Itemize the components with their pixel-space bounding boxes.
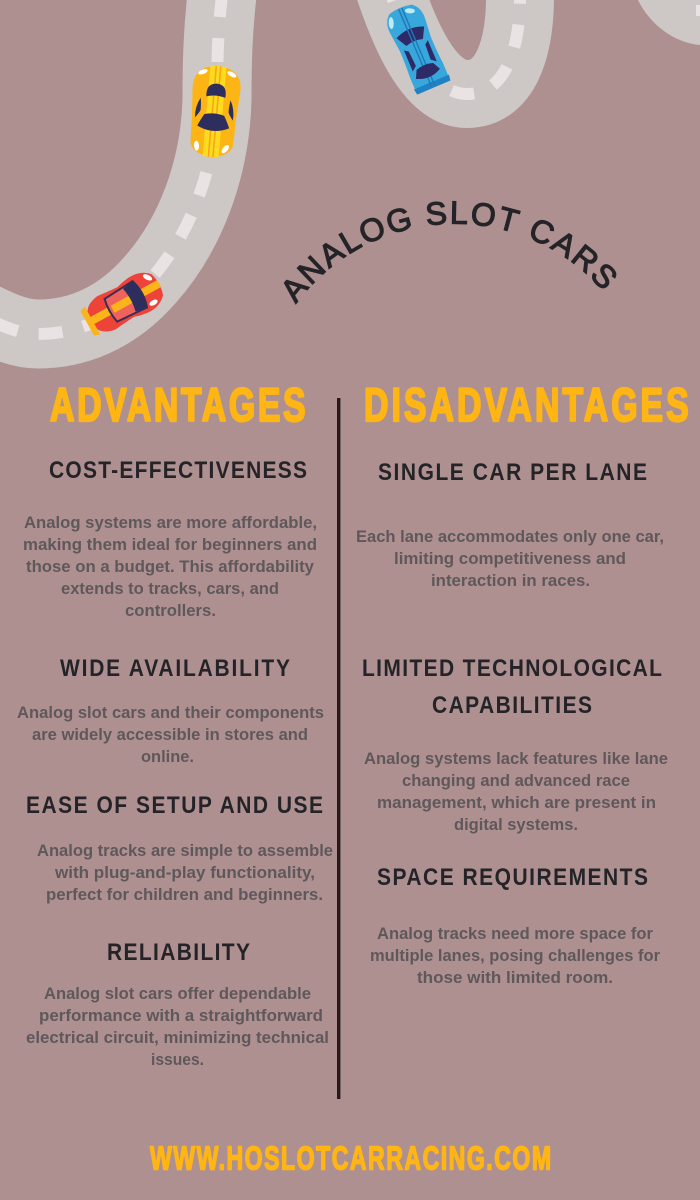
panel: wide availability: Analog slot cars and their components xyxy=(17,704,324,722)
panel: limited technological capabilities: LIMITED TECHNOLOGICAL xyxy=(362,655,662,681)
panel: ease of setup and use: perfect for children and beginners. xyxy=(46,886,323,904)
panel: limited technological capabilities xyxy=(362,655,668,834)
left winding road xyxy=(0,0,222,334)
panel: ease of setup and use: with plug-and-play functionality, xyxy=(54,864,315,882)
panel: limited technological capabilities: CAPABILITIES xyxy=(432,692,592,718)
footer website: WWW.HOSLOTCARRACING.COM xyxy=(150,1141,551,1178)
panel: cost-effectiveness: extends to tracks, cars, and xyxy=(61,580,279,598)
panel: ease of setup and use: Analog tracks are simple to assemble xyxy=(37,842,333,860)
panel: limited technological capabilities: Analog systems lack features like lane xyxy=(364,750,668,768)
column heading: disadvantages: DISADVANTAGES xyxy=(364,379,689,431)
panel: cost-effectiveness: controllers. xyxy=(125,602,216,620)
panel: space requirements xyxy=(370,864,661,987)
panel: single car per lane: interaction in races. xyxy=(431,572,590,590)
panel: reliability: issues. xyxy=(151,1051,204,1069)
panel: single car per lane: SINGLE CAR PER LANE xyxy=(378,459,647,485)
panel: cost-effectiveness: COST-EFFECTIVENESS xyxy=(49,457,307,483)
panel: reliability: RELIABILITY xyxy=(107,939,250,965)
panel: single car per lane: limiting competitiveness and xyxy=(394,550,626,568)
icon: blue car xyxy=(382,0,451,95)
panel: space requirements: Analog tracks need more space for xyxy=(377,925,654,943)
panel: limited technological capabilities: changing and advanced race xyxy=(402,772,630,790)
panel: space requirements: those with limited room. xyxy=(417,969,613,987)
panel: ease of setup and use xyxy=(26,792,333,904)
center divider xyxy=(337,398,340,1099)
panel: wide availability: WIDE AVAILABILITY xyxy=(60,655,290,681)
panel: limited technological capabilities: management, which are present in xyxy=(377,794,656,812)
top-right road corner xyxy=(638,0,700,45)
panel: reliability: electrical circuit, minimizing technical xyxy=(26,1029,329,1047)
middle U-shaped road xyxy=(388,0,520,94)
panel: reliability xyxy=(26,939,329,1069)
curved guide for title xyxy=(296,224,604,304)
panel: single car per lane xyxy=(356,459,664,590)
title: ANALOG SLOT CARS xyxy=(284,200,616,305)
panel: cost-effectiveness xyxy=(23,457,317,620)
panel: wide availability: are widely accessible in stores and xyxy=(32,726,308,744)
panel: cost-effectiveness: those on a budget. This affordability xyxy=(26,558,315,576)
panel: wide availability: online. xyxy=(141,748,194,766)
panel: space requirements: multiple lanes, posing challenges for xyxy=(370,947,661,965)
panel: reliability: performance with a straightforward xyxy=(39,1007,323,1025)
panel: space requirements: SPACE REQUIREMENTS xyxy=(377,864,648,890)
column heading: advantages: ADVANTAGES xyxy=(50,379,306,431)
panel: cost-effectiveness: Analog systems are more affordable, xyxy=(24,514,317,532)
panel: cost-effectiveness: making them ideal for beginners and xyxy=(23,536,317,554)
icon: yellow car xyxy=(187,64,242,159)
panel: wide availability xyxy=(17,655,324,766)
panel: single car per lane: Each lane accommodates only one car, xyxy=(356,528,664,546)
panel: ease of setup and use: EASE OF SETUP AND USE xyxy=(26,792,323,818)
icon: red car xyxy=(78,266,169,341)
panel: limited technological capabilities: digital systems. xyxy=(454,816,578,834)
panel: reliability: Analog slot cars offer dependable xyxy=(44,985,311,1003)
